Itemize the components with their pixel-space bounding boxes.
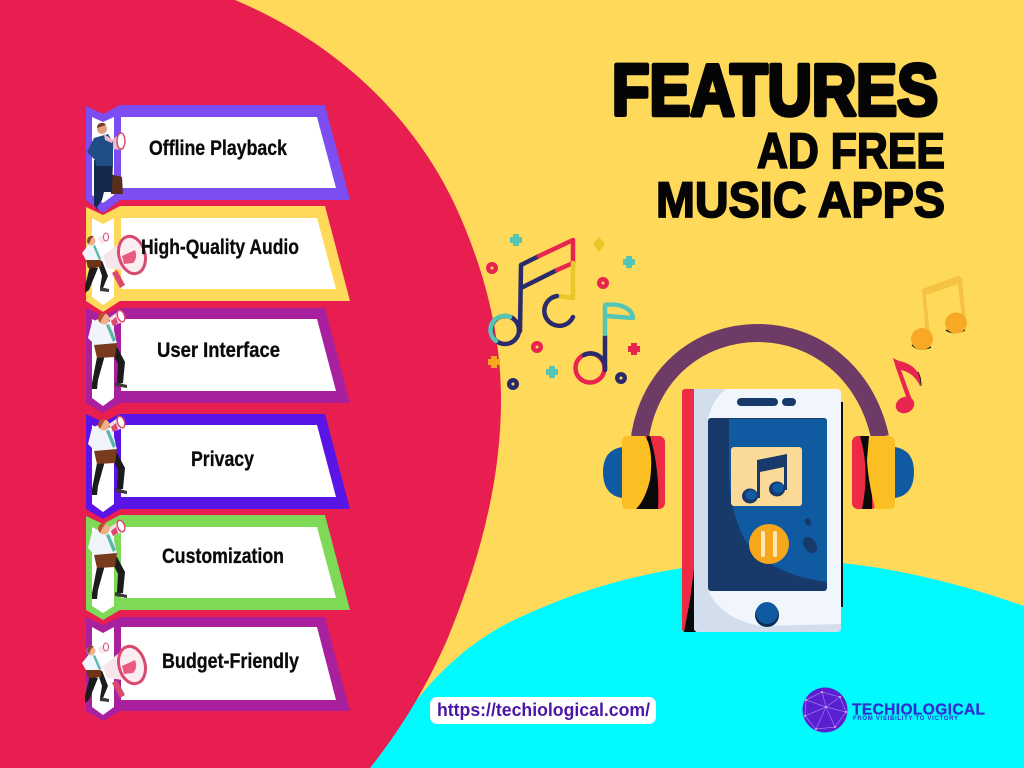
confetti dots <box>486 234 640 390</box>
logo tagline: FROM VISIBILITY TO VICTORY <box>853 716 958 722</box>
label: High-Quality Audio <box>141 236 299 259</box>
right ear cup <box>852 436 914 509</box>
label: Offline Playback <box>149 137 287 160</box>
speaker slots <box>737 398 778 406</box>
label: Privacy <box>191 448 254 471</box>
figure: man with large megaphone <box>82 643 149 703</box>
figure: man with briefcase and megaphone <box>88 309 127 389</box>
icon: single note <box>576 305 633 382</box>
title line: Music Apps: MUSIC APPS <box>656 172 945 228</box>
phone body <box>682 389 843 632</box>
screen <box>708 418 827 591</box>
icon: gold music note <box>911 276 967 350</box>
pause button <box>749 524 789 564</box>
url badge: https://techiological.com/ <box>437 700 650 720</box>
left ear cup <box>603 436 665 509</box>
icon: double note <box>490 240 573 344</box>
card: User Interface <box>86 308 350 413</box>
icon: red music note <box>893 358 921 416</box>
card: Budget-Friendly <box>82 617 350 721</box>
logo globe <box>802 688 848 732</box>
logo: Techiological <box>802 688 985 732</box>
figure: man with briefcase and megaphone <box>88 415 127 495</box>
card: Privacy <box>86 414 350 519</box>
illustration: phone with headphones <box>603 333 914 632</box>
card: Offline Playback <box>86 105 350 213</box>
label: User Interface <box>157 339 280 362</box>
figure: man with large megaphone <box>82 233 149 293</box>
figure: man with briefcase and megaphone <box>88 519 127 599</box>
label: Customization <box>162 545 284 568</box>
title <box>612 51 945 228</box>
title line: Features: FEATURES <box>612 51 938 131</box>
title line: Ad Free: AD FREE <box>757 123 945 179</box>
icon: line music notes with confetti <box>486 234 640 390</box>
home button <box>755 602 779 627</box>
figure: businessman with megaphone <box>87 123 125 212</box>
logo wordmark: TECHIOLOGICAL <box>852 702 985 718</box>
card: High-Quality Audio <box>82 206 350 312</box>
background: red circle panel <box>0 0 501 768</box>
background: cyan hill <box>370 560 1024 768</box>
headband <box>640 333 880 437</box>
card: Customization <box>86 515 350 620</box>
label: Budget-Friendly <box>162 650 299 673</box>
album art with note <box>731 447 802 506</box>
